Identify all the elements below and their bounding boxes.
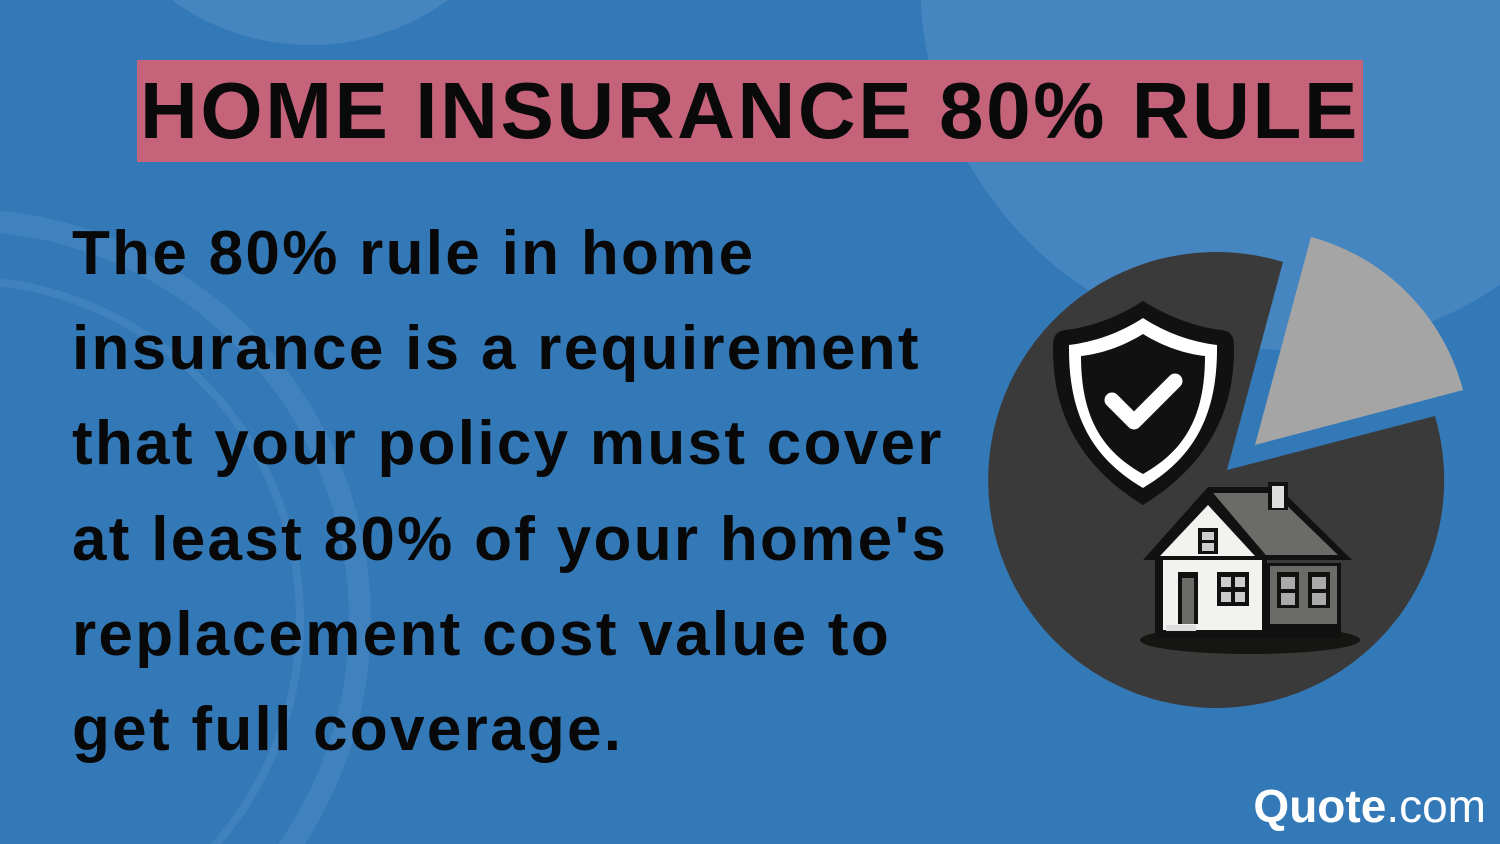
icon: shield with check xyxy=(1053,301,1234,505)
text block: definition: at least 80% of your home's xyxy=(72,505,948,574)
gray slice xyxy=(1255,237,1463,445)
text block: definition: that your policy must cover xyxy=(72,409,944,478)
text block: definition: get full coverage. xyxy=(72,695,623,764)
icon: house xyxy=(1140,482,1360,654)
text block: definition: replacement cost value to xyxy=(72,600,891,669)
text block: definition xyxy=(72,219,948,764)
logo: Quote.com xyxy=(1253,780,1486,832)
text block: definition: The 80% rule in home xyxy=(72,219,755,288)
title: HOME INSURANCE 80% RULE xyxy=(140,66,1360,155)
dark slice xyxy=(988,252,1444,708)
text block: definition: insurance is a requirement xyxy=(72,314,921,383)
